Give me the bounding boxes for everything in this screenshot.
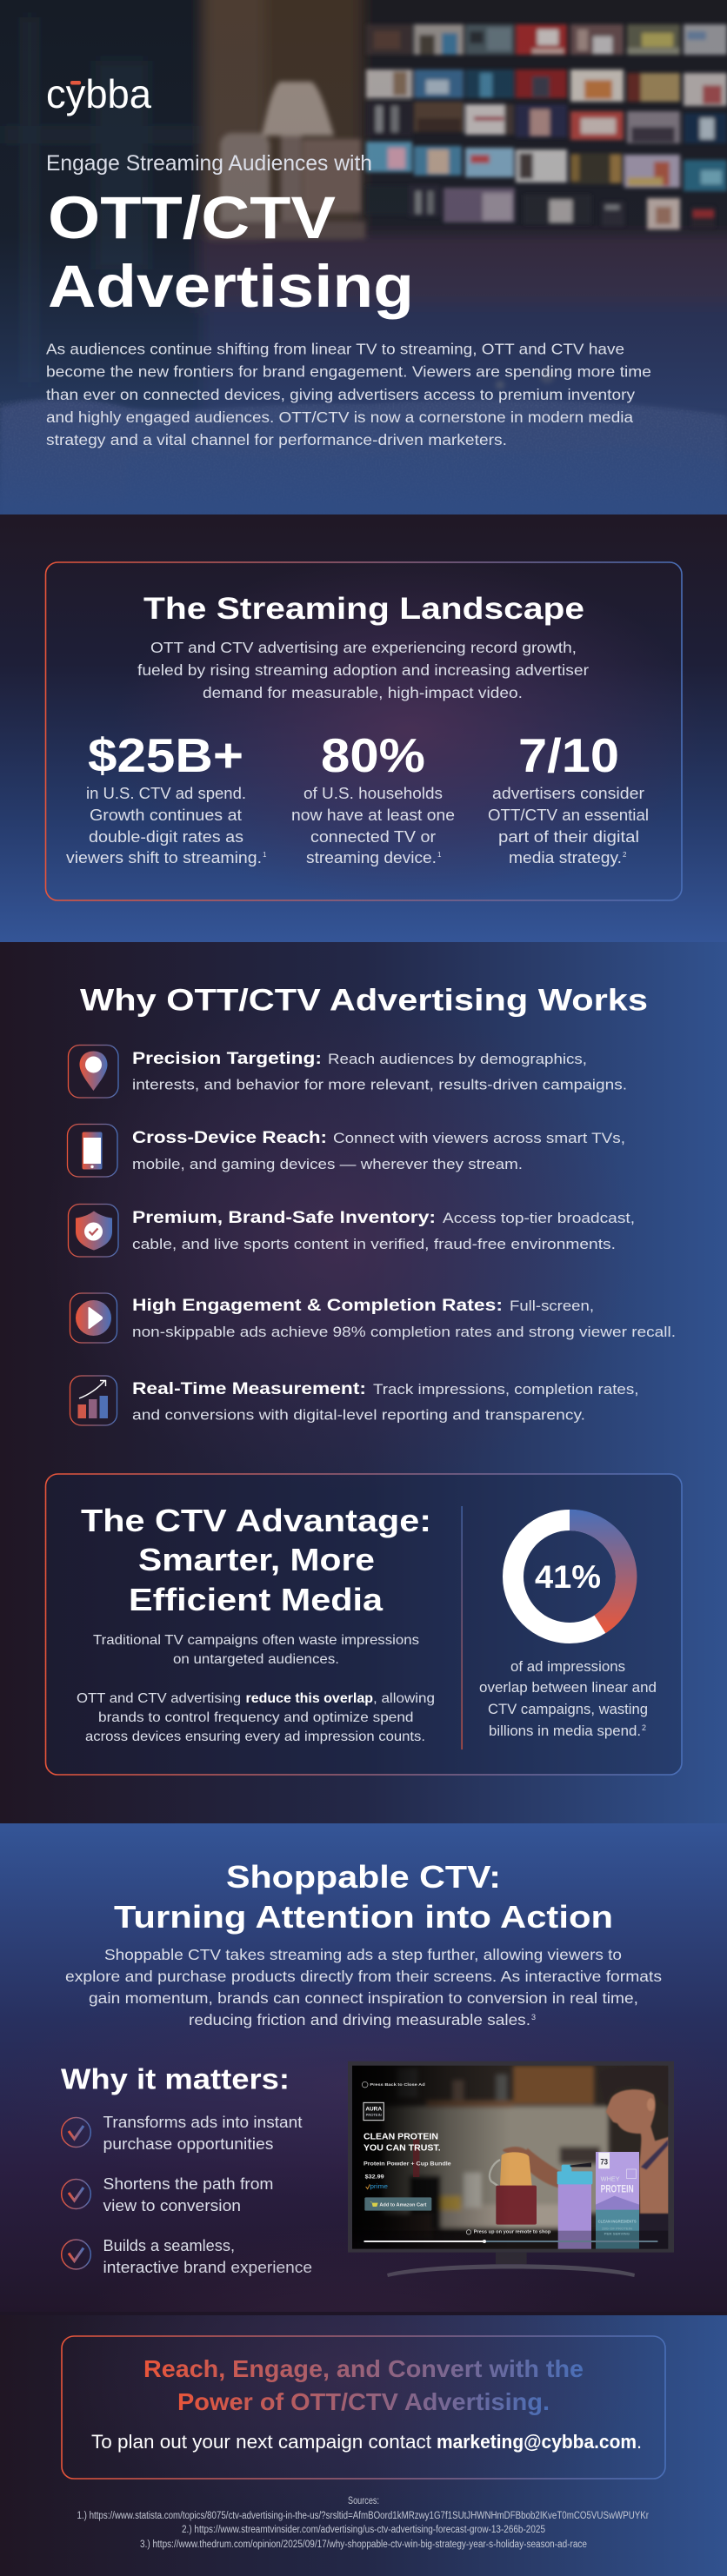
text: reduce this overlap: reduce this overlap xyxy=(245,1691,373,1706)
text: precision targeting: Reach audiences by demographics, xyxy=(328,1052,587,1067)
whey protein pack label: PER SERVING xyxy=(604,2231,630,2235)
bullet: builds a seamless experience: interactive brand experience xyxy=(103,2258,312,2276)
item: high engagement and completion rates xyxy=(70,1293,676,1343)
text: high engagement and completion rates: non-skippable ads achieve 98% completion rates and strong viewer recall. xyxy=(132,1325,676,1340)
ad: headline and product details: prime xyxy=(370,2184,388,2190)
text: overlap description: 2 xyxy=(642,1723,646,1732)
panel: hero xyxy=(0,0,727,521)
text: reduce this overlap: OTT and CTV advertising xyxy=(77,1691,241,1706)
text: precision targeting xyxy=(132,1050,627,1093)
landscape intro text: fueled by rising streaming adoption and increasing advertiser xyxy=(137,661,589,679)
icon: smartphone xyxy=(68,1125,117,1177)
text: traditional TV campaigns xyxy=(93,1633,419,1667)
hero title: OTT/CTV xyxy=(48,184,336,251)
panel: why OTT/CTV advertising works and CTV advantage section xyxy=(0,942,727,1823)
text: cross-device reach: mobile, and gaming devices — wherever they stream. xyxy=(132,1157,523,1172)
whey protein pack label: WHEY xyxy=(601,2177,620,2183)
whey protein pack label: CLEAN INGREDIENTS xyxy=(598,2219,637,2223)
heading: the CTV advantage xyxy=(81,1503,431,1617)
text: reduce this overlap: brands to control frequency and optimize spend xyxy=(98,1710,414,1725)
text: premium, brand-safe inventory: cable, and live sports content in verified, fraud-free environments. xyxy=(132,1237,616,1252)
bullet: transforms ads xyxy=(62,2113,302,2153)
text: shoppable CTV description: Shoppable CTV takes streaming ads a step further, allowing viewers to xyxy=(104,1946,622,1963)
text: cross-device reach xyxy=(132,1129,625,1172)
bullet: shortens the path: Shortens the path from xyxy=(103,2174,273,2193)
text: overlap description: CTV campaigns, wasting xyxy=(488,1701,648,1717)
ad: remote prompt: Press up on your remote to shop xyxy=(474,2230,550,2235)
whey protein pack label: 28G OF PROTEIN xyxy=(602,2226,632,2230)
heading: the CTV advantage: Smarter, More xyxy=(138,1542,375,1577)
stat: $25B+: in U.S. CTV ad spend. xyxy=(86,785,246,802)
heading: shoppable CTV xyxy=(114,1859,613,1935)
stat: $25B+: double-digit rates as xyxy=(89,828,243,846)
text: contact line: To plan out your next campaign contact xyxy=(91,2431,431,2453)
whey protein pack label xyxy=(598,2158,637,2235)
bullet: transforms ads: purchase opportunities xyxy=(103,2134,273,2153)
text: shoppable CTV description xyxy=(65,1946,662,2028)
heading: the CTV advantage: The CTV Advantage: xyxy=(81,1503,431,1538)
heading: reach, engage, and convert: Reach, Engage, and Convert with the xyxy=(143,2355,584,2382)
panel: shoppable CTV section xyxy=(0,1823,727,2315)
heading: shoppable CTV: Turning Attention into Action xyxy=(114,1899,613,1935)
stat: 80%: streaming device. xyxy=(306,849,437,866)
panel: the streaming landscape section xyxy=(0,515,727,942)
text: overlap description: overlap between linear and xyxy=(479,1679,657,1696)
stat: 7/10: advertisers consider xyxy=(492,785,644,802)
ad: headline and product details xyxy=(364,2132,451,2190)
text: real-time measurement: Real-Time Measurement: xyxy=(132,1380,366,1398)
text: premium, brand-safe inventory xyxy=(132,1209,635,1252)
ad: headline and product details: $32.99 xyxy=(365,2174,384,2181)
ad: add to cart button: Add to Amazon Cart xyxy=(379,2202,426,2208)
text: high engagement and completion rates: Full-screen, xyxy=(510,1298,594,1314)
text: shoppable CTV description: 3 xyxy=(531,2013,536,2022)
hero eyebrow: Engage Streaming Audiences with xyxy=(46,151,372,176)
text: overlap description xyxy=(479,1658,657,1739)
stat: 7/10 xyxy=(488,728,649,866)
ad: headline and product details: Protein Powder + Cup Bundle xyxy=(364,2161,451,2168)
stat: 80%: 80% xyxy=(321,728,425,782)
stat: 80%: now have at least one xyxy=(291,807,455,824)
text: sources: 2.) https://www.streamtvinsider.com/advertising/us-ctv-advertising-forecast-grow-13-266b-2025 xyxy=(182,2525,545,2535)
text: overlap description: billions in media spend. xyxy=(489,1723,641,1739)
logo: cybba: cybba xyxy=(46,71,151,116)
stat: 7/10: media strategy. xyxy=(509,849,622,866)
text: shoppable CTV description: explore and purchase products directly from their screens. As interactive formats xyxy=(65,1968,662,1985)
icon: location pin xyxy=(68,1045,118,1098)
TV tile grid xyxy=(366,24,727,229)
ad: progress bar xyxy=(364,2240,658,2243)
text: sources xyxy=(77,2496,649,2550)
bullet: shortens the path: view to conversion xyxy=(103,2196,241,2214)
hero title: Advertising xyxy=(48,253,414,320)
landscape intro text xyxy=(137,639,589,701)
stat: $25B+: $25B+ xyxy=(88,728,243,782)
ad: headline and product details: YOU CAN TRUST. xyxy=(364,2144,441,2154)
hero intro text xyxy=(46,341,651,448)
text: high engagement and completion rates: High Engagement & Completion Rates: xyxy=(132,1297,503,1315)
icon: check circle xyxy=(62,2117,90,2147)
stat: $25B+: Growth continues at xyxy=(90,807,242,824)
icon: check circle xyxy=(62,2240,90,2269)
text: real-time measurement: Track impressions, completion rates, xyxy=(373,1382,638,1398)
item: real-time measurement xyxy=(70,1376,638,1425)
text: premium, brand-safe inventory: Premium, Brand-Safe Inventory: xyxy=(132,1209,436,1227)
ad: close prompt xyxy=(362,2081,425,2088)
stat: $25B+: viewers shift to streaming. xyxy=(66,849,262,866)
hero background photo of living room with streaming TV xyxy=(0,0,727,521)
stat: $25B+: 1 xyxy=(263,851,267,859)
card: the CTV advantage xyxy=(45,1474,682,1775)
ad: close prompt: Press Back to Close Ad xyxy=(370,2082,425,2088)
stat: 7/10: 2 xyxy=(623,851,627,859)
item: precision targeting xyxy=(68,1045,627,1098)
text: contact line xyxy=(91,2431,642,2453)
hero intro text: and highly engaged audiences. OTT/CTV is now a cornerstone in modern media xyxy=(46,408,633,426)
text: premium, brand-safe inventory: Access top-tier broadcast, xyxy=(443,1211,635,1226)
stat: 7/10: part of their digital xyxy=(498,828,639,846)
text: cross-device reach: Cross-Device Reach: xyxy=(132,1129,327,1147)
landscape intro text: OTT and CTV advertising are experiencing record growth, xyxy=(150,639,577,656)
card: call to action border xyxy=(62,2336,665,2479)
heading: the streaming landscape: The Streaming Landscape xyxy=(143,592,584,626)
ad: headline and product details: CLEAN PROTEIN xyxy=(364,2132,438,2141)
text: sources: Sources: xyxy=(348,2496,379,2506)
item: cross-device reach xyxy=(68,1125,625,1177)
panel: call to action and sources section xyxy=(0,2225,727,2576)
text: overlap description: of ad impressions xyxy=(510,1658,625,1675)
text: reduce this overlap xyxy=(77,1691,435,1744)
stat: 80%: of U.S. households xyxy=(303,785,443,802)
chart: 41% donut: 41% xyxy=(535,1559,601,1595)
stat: 80%: connected TV or xyxy=(310,828,436,846)
text: real-time measurement: and conversions with digital-level reporting and transparency. xyxy=(132,1408,585,1424)
text: precision targeting: Precision Targeting: xyxy=(132,1050,322,1068)
TV stand xyxy=(387,2253,635,2277)
bullet: builds a seamless experience: Builds a seamless, xyxy=(103,2236,235,2254)
text: shoppable CTV description: gain momentum, brands can connect inspiration to conversion in real time, xyxy=(89,1989,638,2007)
text: real-time measurement xyxy=(132,1380,638,1424)
bullet: builds a seamless experience xyxy=(62,2236,312,2276)
text: contact line: marketing@cybba.com xyxy=(437,2431,637,2453)
hero intro text: than ever on connected devices, giving advertisers access to premium inventory xyxy=(46,386,635,403)
icon: shield with check xyxy=(68,1205,118,1257)
stat: 7/10: OTT/CTV an essential xyxy=(488,807,649,824)
text: traditional TV campaigns: Traditional TV campaigns often waste impressions xyxy=(93,1633,419,1648)
stat: $25B+ xyxy=(66,728,267,866)
hero title xyxy=(48,184,414,320)
stat: 7/10: 7/10 xyxy=(518,728,619,782)
stat: 80% xyxy=(291,728,455,866)
text: high engagement and completion rates xyxy=(132,1297,676,1340)
whey protein pack label: PROTEIN xyxy=(601,2182,634,2194)
ad: aura protein logo: AURA xyxy=(365,2107,382,2113)
bullet: transforms ads: Transforms ads into instant xyxy=(103,2113,303,2131)
text: sources: 3.) https://www.thedrum.com/opinion/2025/09/17/why-shoppable-ctv-win-big-strategy-year-s-holiday-season-ad-race xyxy=(140,2539,587,2550)
hero intro text: As audiences continue shifting from linear TV to streaming, OTT and CTV have xyxy=(46,341,624,358)
item: premium, brand-safe inventory xyxy=(68,1205,635,1257)
text: shoppable CTV description: reducing friction and driving measurable sales. xyxy=(189,2011,530,2028)
bullet: shortens the path xyxy=(62,2174,273,2214)
ad: aura protein logo: PROTEIN xyxy=(366,2113,382,2117)
heading: reach, engage, and convert xyxy=(143,2355,584,2415)
stat: 80%: 1 xyxy=(437,851,442,859)
card: streaming landscape border xyxy=(45,562,682,900)
heading: shoppable CTV: Shoppable CTV: xyxy=(226,1859,501,1895)
icon: rising bar chart xyxy=(70,1376,117,1425)
chart: 41% donut xyxy=(513,1520,626,1633)
text: contact line: . xyxy=(637,2431,642,2453)
heading: why OTT/CTV advertising works: Why OTT/CTV Advertising Works xyxy=(80,982,648,1017)
landscape intro text: demand for measurable, high-impact video. xyxy=(203,684,523,701)
ad: add to cart button xyxy=(364,2197,431,2211)
icon: check circle xyxy=(62,2180,90,2209)
ad: aura protein logo xyxy=(364,2102,384,2121)
text: reduce this overlap: across devices ensuring every ad impression counts. xyxy=(85,1730,425,1744)
TV screen ad photo xyxy=(352,2065,670,2254)
heading: reach, engage, and convert: Power of OTT/CTV Advertising. xyxy=(177,2388,550,2415)
text: cross-device reach: Connect with viewers across smart TVs, xyxy=(333,1131,625,1146)
illustration: TV showing shoppable ad xyxy=(348,2061,674,2277)
text: traditional TV campaigns: on untargeted audiences. xyxy=(173,1652,339,1667)
text: reduce this overlap: , allowing xyxy=(373,1691,435,1706)
heading: why it matters: Why it matters: xyxy=(61,2063,290,2095)
hero intro text: strategy and a vital channel for performance-driven marketers. xyxy=(46,431,507,448)
sofa foreground xyxy=(0,368,727,491)
text: precision targeting: interests, and behavior for more relevant, results-driven campaigns. xyxy=(132,1078,627,1093)
hero intro text: become the new frontiers for brand engagement. Viewers are spending more time xyxy=(46,363,651,381)
whey protein pack label: 73 xyxy=(600,2158,608,2167)
icon: play button xyxy=(70,1293,117,1343)
heading: the CTV advantage: Efficient Media xyxy=(129,1582,384,1617)
